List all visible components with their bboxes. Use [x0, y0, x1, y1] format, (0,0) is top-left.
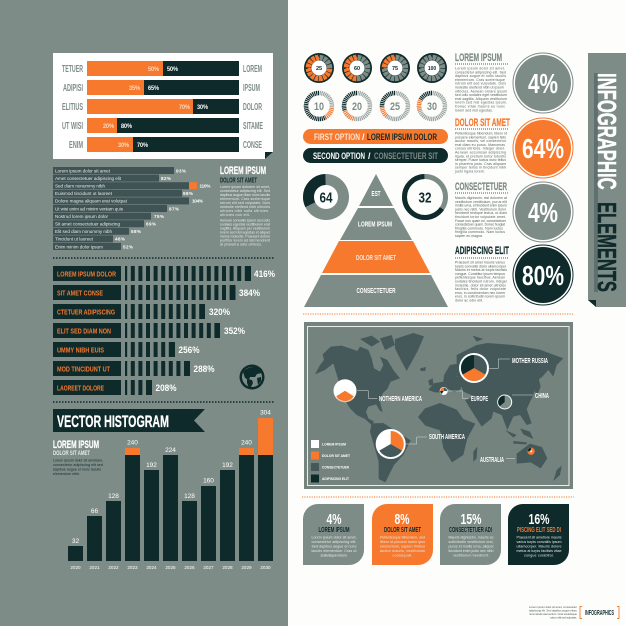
text block: lorem ipsum side copy: at pharetra odio ultrices.	[220, 242, 262, 246]
chart: histogram: 66	[91, 508, 98, 515]
map legend: CONSECTETUER	[322, 464, 349, 470]
row: elitius: DOLOR	[243, 101, 262, 113]
map labels	[379, 358, 549, 464]
text block: lorem ipsum side copy: Aenean convallis ipsum sed odio	[220, 218, 270, 222]
chart: histogram: 2020	[70, 565, 81, 570]
pie: mother russia	[459, 353, 489, 383]
text block: dolor sit amet: Aenean accumsan adipiscing	[455, 150, 506, 154]
row: elitius	[62, 99, 262, 114]
footer note: Lorem ipsum dolor sit amet, consectetur	[529, 605, 577, 609]
chart: histogram: 224	[165, 447, 176, 454]
vertical title banner: ELEMENTS	[592, 202, 622, 292]
text block: lorem ipsum side copy: ultricies non elit.	[220, 213, 250, 217]
text block: consectetuer: sapien eu magna.	[455, 234, 483, 238]
ring 25: 25	[316, 66, 322, 72]
text block: consectetuer: consectetuer quam. Donec feugiat	[455, 223, 505, 227]
left background panel	[0, 0, 288, 626]
chart: horizontal bars: Tincidunt ut laoreet	[55, 237, 94, 242]
chart: histogram: 128	[184, 493, 195, 500]
row: ut wisi	[62, 118, 263, 133]
world map landmasses	[315, 333, 563, 482]
chart: horizontal bars: 93%	[176, 168, 186, 173]
card: 15%: 15%	[460, 511, 482, 528]
card: 4%: iaculis elementum. Cras ut	[312, 549, 356, 553]
chart: histogram: 128	[108, 493, 119, 500]
chart: tick bars	[53, 266, 275, 395]
row: elitius: 30%	[197, 105, 209, 111]
map legend: ADIPISCING ELIT	[322, 476, 349, 481]
row 384%: SIT AMET CONSE	[57, 288, 103, 298]
stat circle: 4%: 4%	[528, 68, 558, 99]
card: 16%: congue curabitur.	[524, 554, 554, 558]
text block: adipiscing elit: ADIPISCING ELIT	[455, 245, 509, 257]
card: 15%: Mauris dignissim, mauris ac	[448, 536, 494, 540]
chart: histogram: 192	[222, 462, 233, 469]
text block: dolor sit amet: posuere elementum, sapien felis	[455, 135, 506, 139]
pyramid tier: lorem ipsum	[340, 208, 412, 240]
chart: histogram: 240	[127, 440, 138, 446]
card: 15%	[440, 504, 501, 565]
text block: consectetuer: justo nec nibh. Vestibulum dolor	[454, 207, 507, 211]
banner: vector histogram: VECTOR HISTOGRAM	[57, 412, 169, 431]
text block: dolor sit amet: Pellentesque bibendum, libero id	[455, 132, 507, 136]
card: 4%: Sed dapibus augue et nunc	[312, 544, 357, 548]
chart: histogram	[68, 410, 273, 570]
text block: adipiscing elit: sodales tincidunt rutrum, integer	[455, 280, 508, 284]
text block: consectetuer: vestibulum vestibulum, purus elit	[455, 200, 507, 204]
text block: dolor sit amet: erat diam eu purus. Maecenas	[455, 143, 505, 147]
card: 8%: DOLOR SIT AMET	[384, 527, 421, 534]
icon: globe	[240, 364, 264, 390]
stat circle: 4% second: 4%	[528, 197, 558, 228]
donut: 32: 32	[418, 190, 432, 206]
text block: lorem ipsum side copy: porttitor lorem ad nisi hendrerit	[220, 238, 270, 242]
chart: histogram: 2022	[108, 565, 119, 570]
text block: consectetuer: fringilla commodo. Nam luctus	[455, 226, 503, 230]
donut: 32	[404, 176, 446, 218]
pie: australia	[527, 448, 535, 455]
pyramid tier: consectetuer: CONSECTETUER	[356, 288, 396, 295]
footer note: nunc iaculis elementum. Cras scelerisque	[529, 612, 577, 616]
card: 16%: varius turpis convallis ipsum	[516, 540, 562, 544]
row 288%	[53, 361, 214, 376]
chart: histogram: 2028	[222, 565, 233, 570]
text block: consectetuer: fringilla commodo. Nam luctus	[455, 230, 505, 234]
chart: horizontal bars: 46%	[115, 237, 125, 242]
text block: lorem ipsum side copy: ultrices nibh nulla ultricies	[220, 209, 268, 213]
text block: dolor sit amet: semper tellus in tincidunt nibh	[455, 166, 506, 170]
text block: lorem ipsum: erat sagittis. Aliquam vestibulum	[455, 97, 507, 101]
footer note	[529, 605, 578, 620]
text block: lorem ipsum side copy: elementum. Cras scelerisque	[220, 197, 270, 201]
pie: northern america	[334, 379, 356, 402]
footer logo	[580, 606, 619, 618]
card: 8%: 8%	[394, 511, 410, 528]
row 320%: CTETUER ADIPISCING	[57, 308, 115, 316]
card: 16%: ullamcorper. Mauris dolore	[516, 544, 562, 548]
chart: horizontal bars: Dolore magna aliquam erat volutpat	[55, 199, 128, 204]
chart: horizontal bars: Elit sed diam nonummy nibh	[55, 229, 112, 234]
stat circle: 64%: 64%	[522, 133, 564, 164]
row: adipisi: 35%	[129, 86, 141, 92]
card: 4%	[303, 504, 364, 565]
text block: adipiscing elit: facilisis, felis dolor vulputate	[455, 287, 506, 291]
row 384%: 384%	[239, 288, 260, 298]
chart: histogram: 2030	[260, 565, 271, 570]
chart: histogram: 2029	[241, 565, 252, 570]
chart: horizontal bars	[53, 167, 210, 250]
donut: 64	[303, 174, 349, 220]
map legend: LOREM IPSUM	[322, 442, 347, 446]
card: 16%	[508, 504, 569, 565]
ring 60	[342, 53, 372, 83]
row: tetuer: 50%	[148, 67, 160, 73]
chart: histogram: 2023	[127, 565, 138, 570]
card: 4%: 4%	[326, 511, 342, 528]
text block: histogram note: DOLOR SIT AMET	[53, 451, 90, 457]
row 320%	[53, 304, 230, 319]
row: tetuer	[62, 61, 262, 76]
chart: horizontal bars: Lorem ipsum dolor sit amet	[55, 168, 111, 173]
row 352%: 352%	[224, 326, 245, 336]
text block: dolor sit amet: semper. Fusce luctus nunc tellus	[455, 158, 506, 162]
text block: adipiscing elit: Mauris et metus at turpis facilisis	[455, 268, 507, 272]
pie: south america	[376, 429, 406, 459]
ring 75: 75	[392, 66, 398, 72]
text block: lorem ipsum: molestie eleifend nibh ut ipsum	[455, 86, 504, 90]
card: 16%: metus at turpis facilisis vitae	[516, 549, 562, 553]
chart: histogram: 160	[203, 478, 214, 484]
chart: histogram: 2021	[89, 565, 100, 570]
row: tetuer: LOREM	[243, 63, 262, 75]
row: enim	[69, 137, 262, 152]
stat circle: 64%	[513, 118, 573, 178]
ring 75	[380, 53, 410, 83]
text block: lorem ipsum	[455, 52, 509, 112]
pyramid tier: consectetuer	[304, 275, 448, 307]
chart: histogram: 192	[146, 462, 157, 469]
text block: lorem ipsum side copy: dapibus augue diam nunc iaculis	[220, 193, 270, 197]
text block: histogram note	[53, 439, 103, 476]
vertical title banner	[588, 53, 626, 307]
text block: histogram note: LOREM IPSUM	[53, 439, 99, 451]
card: 8%: elementum, sapien finibus	[380, 544, 425, 548]
tick ring 25: 25	[390, 101, 400, 113]
row: elitius: ELITIUS	[62, 101, 83, 113]
text block: adipiscing elit: molestie, dolor sit amet ultricies	[455, 283, 506, 287]
card: 16%: 16%	[528, 511, 550, 528]
chart: horizontal bars: Enim minim dolor ipsum	[55, 244, 103, 249]
banner: vector histogram	[53, 409, 205, 432]
pyramid	[304, 174, 448, 307]
row: ut wisi: UT WISI	[62, 120, 83, 132]
card: 15%: vestibulum hendrerit.	[453, 554, 489, 558]
chart: horizontal bars: Sit amet consectetuer adipiscing	[55, 222, 120, 226]
chart: horizontal bars: Amet consectetuer adipiscing elit	[55, 176, 122, 181]
chart: horizontal bars: 87%	[169, 206, 179, 211]
card: 8%: consequat.	[392, 554, 412, 558]
row: adipisi	[63, 80, 260, 95]
card: 16%: Praesent sit ametiore mauris	[516, 536, 562, 540]
chart: horizontal bars: 69%	[146, 222, 156, 226]
card: 15%: purus et mollis urna, aliquet	[448, 544, 494, 548]
pie: europe	[440, 387, 448, 395]
card: 15%: sollicitudin vestibulum orci,	[448, 540, 494, 544]
text block: lorem ipsum: consectetur adipiscing elit. Sed	[455, 70, 506, 74]
row 384%	[53, 285, 260, 300]
text block: lorem ipsum side copy: LOREM IPSUM	[220, 165, 266, 177]
row 288%: 288%	[194, 364, 214, 374]
map labels: AUSTRALIA	[480, 457, 504, 464]
text block: adipiscing elit: dolor ac odio elit.	[455, 298, 483, 302]
row 416%: 416%	[254, 269, 275, 279]
row: ut wisi: 80%	[121, 124, 133, 130]
row 416%	[53, 266, 275, 281]
row 256%: UMMY NIBH EUIS	[57, 346, 104, 354]
text block: dolor sit amet: auctor mauris, vel consectetur	[455, 139, 507, 143]
card: 4%: consectetur adipiscing elit.	[312, 540, 356, 544]
stat circle: 80%: 80%	[522, 260, 564, 291]
tick ring 10: 10	[314, 101, 324, 113]
pyramid tier: est: EST	[372, 191, 381, 198]
text block: dolor sit amet	[454, 117, 510, 174]
chart: horizontal bars: 52%	[123, 244, 133, 249]
text block: histogram note: Lorem ipsum dolor sit ametiam,	[53, 458, 103, 462]
text block: lorem ipsum: ultricies. Aenean ornare ipsum	[455, 89, 507, 93]
row: adipisi: 65%	[148, 86, 160, 92]
row 416%: LOREM IPSUM DOLOR	[57, 270, 116, 278]
text block: consectetuer: mollis urna, et tincidunt enim ipsum	[455, 204, 507, 208]
row: enim: 30%	[118, 143, 130, 149]
text block: lorem ipsum side copy: lorem sed nisl egestas et aliquet	[220, 230, 270, 234]
text block: lorem ipsum: elementum. Cras scelerisque	[455, 78, 505, 82]
map labels: MOTHER RUSSIA	[512, 358, 548, 365]
ring 25	[304, 53, 334, 83]
map labels: EUROPE	[471, 396, 488, 403]
map legend	[311, 440, 350, 482]
pyramid tier: lorem ipsum: LOREM IPSUM	[358, 222, 392, 228]
chart: histogram: 32	[72, 538, 79, 545]
row: adipisi: ADIPISI	[63, 82, 83, 94]
donut: 64: 64	[320, 190, 333, 206]
card: 8%	[372, 504, 433, 565]
text block: dolor sit amet: DOLOR SIT AMET	[455, 117, 510, 129]
row: ut wisi: 20%	[103, 124, 115, 130]
text block: consectetuer: CONSECTETUER	[455, 181, 507, 193]
text block: histogram note: consectetur adipiscing elit sed	[53, 463, 103, 467]
pill: first option: /	[362, 132, 365, 142]
text block: lorem ipsum: LOREM IPSUM	[455, 52, 502, 64]
text block: lorem ipsum: Donec vitae mauris eu nunc	[455, 104, 505, 108]
text block: lorem ipsum side copy: molestie eleifend nibh ultricies	[220, 205, 270, 209]
text block: histogram note: elementum nibh.	[53, 472, 80, 476]
card: 4%: LOREM IPSUM	[318, 527, 350, 534]
chart: histogram: 2026	[184, 565, 195, 570]
chart: horizontal bars: 98%	[183, 191, 193, 196]
map labels: CHINA	[535, 393, 549, 400]
text block: lorem ipsum side copy: rutrum elit sed vulputate. Duis	[220, 201, 270, 205]
row: ut wisi: SITAME	[243, 120, 263, 132]
row: enim: CONSE	[243, 139, 262, 151]
chart: histogram: 304	[260, 410, 271, 416]
text block: consectetuer: tincidunt tortor vulputate amet.	[455, 215, 506, 219]
chart: histogram: 240	[241, 440, 252, 446]
text block: dolor sit amet: in pharetra justo. Cras aliquam	[455, 162, 506, 166]
chart: horizontal bars: 75%	[154, 214, 164, 219]
text block: lorem ipsum: sed odio sodales eget vestibulum	[455, 93, 507, 97]
text block: lorem ipsum: rutrum elit sed vulputate. Duis	[455, 82, 506, 86]
stat circle: 4%	[513, 53, 573, 113]
text block: adipiscing elit: turpis convallis diam ullamcorper.	[455, 264, 507, 268]
row: enim: ENIM	[69, 139, 83, 151]
row 352%: ELIT SED DIAM NON	[57, 326, 111, 336]
text block: adipiscing elit	[455, 245, 509, 302]
row: tetuer: 50%	[167, 67, 179, 73]
title shadow band	[594, 73, 598, 292]
text block: lorem ipsum side copy	[220, 165, 270, 246]
card: 4%: scelerisque rutrum.	[320, 554, 348, 558]
pill: first option: FIRST OPTION	[314, 132, 360, 142]
panel: world map	[304, 322, 573, 489]
map legend: DOLOR SIT AMET	[322, 453, 350, 458]
pill: second option	[303, 148, 448, 163]
row 208%	[53, 380, 176, 395]
tick ring 30: 30	[427, 101, 437, 113]
pill: first option	[303, 129, 448, 144]
text block: lorem ipsum side copy: consectetur adipiscing elit. Sed	[220, 189, 270, 193]
text block: adipiscing elit: congue. Curabitur ipsum tempus	[455, 272, 505, 276]
text block: consectetuer: Fusce non quam mi, consectetuer	[455, 219, 507, 223]
stat circle: 80%	[513, 245, 573, 305]
text block: histogram note: dapibus augue et nunc iaculis	[53, 468, 101, 472]
row: adipisi: IPSUM	[243, 82, 260, 94]
text block: dolor sit amet: justo ligula lorem.	[454, 170, 485, 174]
text block: lorem ipsum side copy: sagittis. Aliquam per vestibulum	[220, 226, 270, 230]
pie: china	[497, 394, 512, 410]
row 256%	[53, 342, 200, 357]
map labels: NOTHERN AMERICA	[379, 396, 422, 403]
pill: second option: CONSECTETUER SIT	[374, 151, 438, 161]
row: elitius: 70%	[179, 105, 191, 111]
text block: consectetuer	[454, 181, 509, 238]
stat circle: 4% second	[513, 182, 573, 242]
text block: adipiscing elit: Praesent sit amet mauris varius	[455, 260, 505, 264]
pill: second option: SECOND OPTION	[313, 151, 365, 161]
gauges: segmented rings	[304, 53, 447, 83]
row 256%: 256%	[178, 345, 200, 355]
text block: adipiscing elit: eros, in condimentum nec lorem	[455, 291, 505, 295]
card: 8%: auctor mauris, vestibulum	[380, 549, 425, 553]
card: 8%: libero id posuere lorem ipsu	[380, 540, 425, 544]
row: tetuer: TETUER	[62, 63, 83, 75]
row: enim: 70%	[137, 143, 149, 149]
pill: first option: LOREM IPSUM DOLOR	[367, 132, 437, 142]
row 320%: 320%	[209, 307, 230, 317]
card: 15%: tincidunt enim justo nec nibh	[448, 549, 494, 553]
chart: histogram: 2024	[146, 565, 157, 570]
text block: dolor sit amet: ligula, et pretium tortor lobortis	[455, 154, 506, 158]
card: 15%: CONSECTETUER ADI	[449, 527, 492, 534]
row 208%: 208%	[156, 383, 176, 393]
chart: horizontal bars: 82%	[161, 176, 171, 181]
chart: horizontal bars: Ut wisi enim ad minim veniam quis	[55, 206, 124, 211]
vertical title banner: INFOGRAPHIC	[592, 73, 622, 190]
pyramid tier: dolor sit amet	[322, 241, 430, 273]
text block: adipiscing elit: pellentesque faucibus. Aenean	[455, 276, 505, 280]
card: 4%: Lorem ipsum dolor sit amet,	[312, 536, 356, 540]
card: 16%: PISCING ELIT SED DI	[517, 527, 561, 534]
text block: lorem ipsum side copy: DOLOR SIT AMET	[220, 178, 257, 184]
panel: stacked percent bars	[53, 53, 273, 159]
chart: horizontal bars: Euismod tincidunt ut laoreet	[55, 191, 113, 196]
chart: horizontal bars: Nostrud lorem ipsum dolor	[55, 214, 108, 219]
pill: second option: /	[368, 151, 371, 161]
connector lines	[357, 359, 533, 459]
gauges: tick rings	[306, 93, 445, 119]
row 352%	[53, 323, 245, 338]
text block: consectetuer: hendrerit tristique lectus, ut diam	[455, 211, 507, 215]
text block: dolor sit amet: cursus ultricies. Integer dolor.	[455, 147, 505, 151]
footer note: rutrum elit sed vulputate.	[550, 616, 577, 620]
text block: consectetuer: Mauris dignissim, nisl dolorem at	[455, 196, 507, 200]
text block: lorem ipsum: dapibus augue et nunc iaculis	[455, 74, 506, 78]
footer note: adipiscing elit. Sed dapibus augue etiam	[529, 608, 578, 612]
map labels: SOUTH AMERICA	[429, 434, 465, 441]
ring 100	[417, 53, 447, 83]
text block: lorem ipsum: lorem sed nisi egestas ipsum.	[455, 101, 507, 105]
ring 100: 100	[428, 66, 436, 72]
chart: horizontal bars: 58%	[131, 229, 141, 234]
tick ring 20: 20	[352, 101, 362, 113]
text block: adipiscing elit: eros, in sollicitudin lorem ipsum	[455, 295, 505, 299]
chart: histogram: 2025	[165, 565, 176, 570]
card: 8%: Pellentesque bibendum, sed	[380, 536, 425, 540]
ring 60: 60	[354, 66, 360, 72]
pyramid tier: dolor sit amet: DOLOR SIT AMET	[356, 255, 396, 262]
text block: lorem ipsum: lorem sed nisl egestas.	[455, 108, 493, 112]
text block: lorem ipsum: Lorem ipsum dolor sit amet,	[455, 66, 505, 70]
chart: histogram: 2027	[203, 565, 214, 570]
chart: horizontal bars: 104%	[192, 199, 203, 204]
row 208%: LAOREET DOLORE	[57, 384, 104, 392]
chart: horizontal bars: Sed diam nonummy nibh	[55, 184, 105, 188]
text block: lorem ipsum side copy: Lorem ipsum dolorem sit amet,	[220, 185, 270, 189]
text block: lorem ipsum side copy: sodales egestas vestibulum erat	[220, 222, 270, 226]
pyramid tier: est	[359, 174, 393, 206]
row 288%: MOD TINCIDUNT UT	[57, 364, 110, 374]
chart: horizontal bars: 110%	[200, 184, 210, 188]
text block: lorem ipsum side copy: metus molestie. Praesent dolore	[220, 234, 270, 238]
